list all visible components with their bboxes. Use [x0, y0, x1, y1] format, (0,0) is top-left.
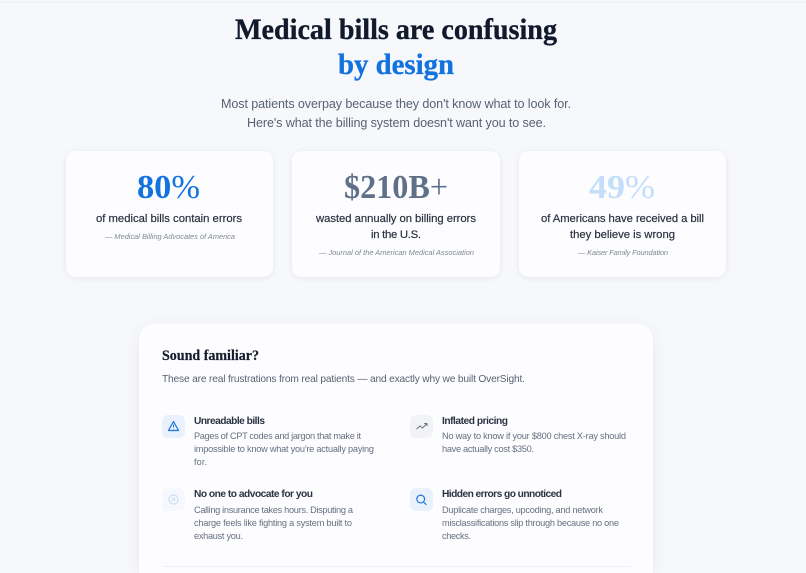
subtitle: Here's what the billing system doesn't want you to see.	[247, 116, 546, 130]
panel: stat $210B+: $210B+	[344, 169, 448, 206]
panel: stat $210B+: — Journal of the American Medical Association	[318, 248, 474, 257]
item: inflated pricing	[410, 415, 626, 454]
item: hidden errors: Hidden errors go unnoticed	[442, 489, 562, 500]
panel: stat 49%	[519, 151, 726, 277]
item: no one to advocate: Calling insurance takes hours. Disputing a	[194, 505, 354, 515]
item: unreadable bills: Pages of CPT codes and jargon that make it	[194, 431, 361, 441]
item: inflated pricing: Inflated pricing	[442, 416, 508, 427]
panel: stat 80%: 80%	[137, 169, 200, 206]
icon: trending up	[410, 415, 433, 438]
title: Medical bills are confusing	[235, 13, 557, 46]
item: unreadable bills: for.	[194, 457, 207, 467]
item: inflated pricing: No way to know if your $800 chest X-ray should	[442, 431, 626, 441]
item: no one to advocate: No one to advocate for you	[194, 489, 313, 500]
icon: magnifier	[410, 488, 433, 511]
icon: warning triangle	[162, 415, 185, 438]
item: unreadable bills: impossible to know what you're actually paying	[194, 444, 374, 454]
panel heading: Sound familiar?	[162, 348, 259, 364]
item: hidden errors	[410, 488, 619, 541]
item: no one to advocate: charge feels like fighting a system built to	[194, 518, 352, 528]
item: unreadable bills	[162, 415, 374, 467]
item: hidden errors: misclassifications slip through because no one	[442, 518, 619, 528]
item: unreadable bills: Unreadable bills	[194, 416, 265, 427]
item: no one to advocate	[162, 488, 354, 541]
item: hidden errors: Duplicate charges, upcoding, and network	[442, 505, 603, 515]
panel intro text: These are real frustrations from real patients — and exactly why we built OverSight.	[162, 374, 525, 385]
panel: stat 80%: — Medical Billing Advocates of America	[104, 232, 235, 241]
panel: stat $210B+	[292, 151, 500, 277]
panel: sound familiar	[139, 324, 653, 573]
item: hidden errors: checks.	[442, 531, 471, 541]
subtitle: Most patients overpay because they don't know what to look for.	[221, 97, 571, 111]
panel: stat 49%: 49%	[589, 169, 655, 206]
panel: stat 49%: of Americans have received a bill	[541, 213, 704, 225]
title: by design	[338, 48, 454, 81]
item: inflated pricing: have actually cost $350.	[442, 444, 534, 454]
panel: stat 49%: they believe is wrong	[570, 229, 675, 241]
subtitle	[221, 97, 571, 130]
title	[235, 13, 557, 81]
panel: stat $210B+: in the U.S.	[371, 229, 421, 241]
item: no one to advocate: exhaust you.	[194, 531, 243, 541]
icon: circle x	[162, 488, 185, 511]
panel: stat 80%	[66, 151, 273, 277]
panel: stat $210B+: wasted annually on billing errors	[315, 213, 476, 225]
panel: stat 80%: of medical bills contain errors	[96, 213, 242, 225]
panel: stat 49%: — Kaiser Family Foundation	[577, 248, 668, 257]
